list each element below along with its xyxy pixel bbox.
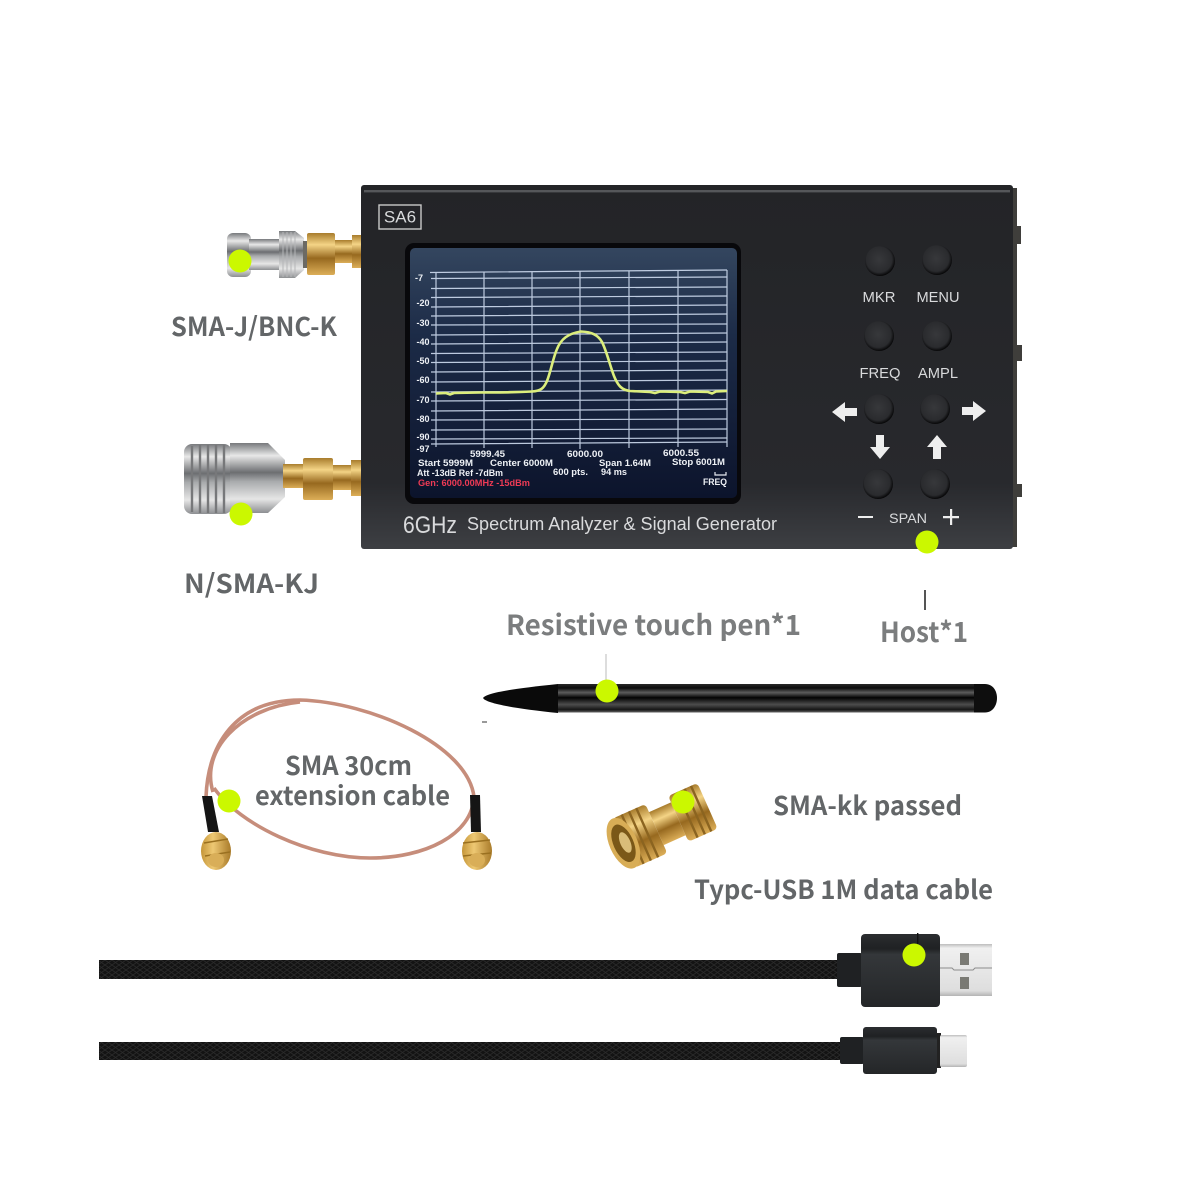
y axis labels: -20 [416, 298, 430, 308]
keypad labels [860, 289, 960, 526]
screen readouts: Center 6000M [490, 458, 553, 468]
device product name [403, 512, 777, 539]
keypad labels: MKR [862, 289, 896, 306]
screen readouts: 94 ms [601, 467, 627, 477]
SMA-KK adapter [600, 781, 718, 874]
SMA extension cable [201, 700, 492, 870]
y axis labels: -80 [416, 414, 430, 424]
label: host: Host*1 [880, 611, 968, 651]
y axis labels: -97 [416, 444, 430, 454]
screen [405, 243, 741, 504]
y axis labels: -7 [415, 273, 423, 283]
label: SMA-kk: SMA-kk passed [773, 786, 962, 823]
side ports [1012, 188, 1022, 547]
screen readouts: 6000.00 [567, 449, 603, 459]
left plug [202, 796, 219, 832]
signal trace [436, 332, 727, 394]
label: extension cable [255, 746, 450, 813]
y axis labels: -30 [416, 318, 430, 328]
keypad labels: FREQ [860, 365, 900, 382]
keypad arrows [832, 401, 986, 525]
label: touch pen: Resistive touch pen*1 [506, 604, 801, 644]
USB-C cable [99, 1027, 967, 1074]
right plug [470, 795, 481, 832]
screen readouts: 600 pts. [553, 467, 588, 477]
y axis labels: -40 [416, 337, 430, 347]
model badge [379, 205, 421, 229]
device product name: 6GHz [403, 512, 457, 539]
screen readouts: Gen: 6000.00MHz -15dBm [418, 478, 530, 488]
leader line: data cable [917, 933, 918, 945]
label: BNC adapter: SMA-J/BNC-K [171, 307, 337, 344]
model badge: SA6 [384, 208, 416, 226]
label: extension cable: extension cable [255, 776, 450, 813]
keypad labels: AMPL [918, 365, 958, 382]
BNC adapter connector [227, 231, 361, 278]
label: N adapter: N/SMA-KJ [184, 564, 319, 601]
y axis labels: -50 [416, 356, 430, 366]
screen readouts: 6000.55 [663, 448, 699, 458]
y axis labels: -90 [416, 432, 430, 442]
enclosure [361, 185, 1013, 549]
resistive touch pen [483, 684, 997, 713]
device: spectrum analyzer host [361, 185, 1022, 549]
device product name: Spectrum Analyzer & Signal Generator [467, 514, 777, 534]
y axis labels: -70 [416, 395, 430, 405]
N-type adapter connector [184, 443, 361, 514]
y axis labels [415, 273, 430, 454]
keypad labels: MENU [916, 289, 960, 306]
keypad buttons [863, 245, 952, 499]
small mark near pen [482, 721, 487, 723]
screen readouts [417, 448, 727, 488]
screen readouts: Att -13dB Ref -7dBm [417, 468, 503, 478]
label: data cable: Typc-USB 1M data cable [694, 870, 993, 907]
leader line: host [924, 590, 926, 610]
y axis labels: -60 [416, 375, 430, 385]
leader line: touch pen [606, 654, 607, 682]
label: extension cable: SMA 30cm [285, 746, 412, 783]
screen readouts: Start 5999M [418, 458, 473, 468]
marker dots [218, 250, 938, 966]
spectrum grid [430, 270, 727, 449]
screen readouts: FREQ [703, 477, 727, 487]
screen readouts: 5999.45 [470, 449, 505, 459]
keypad labels: SPAN [889, 510, 927, 526]
USB-A cable [99, 934, 992, 1007]
screen readouts: Stop 6001M [672, 457, 725, 467]
screen readouts: Span 1.64M [599, 458, 651, 468]
